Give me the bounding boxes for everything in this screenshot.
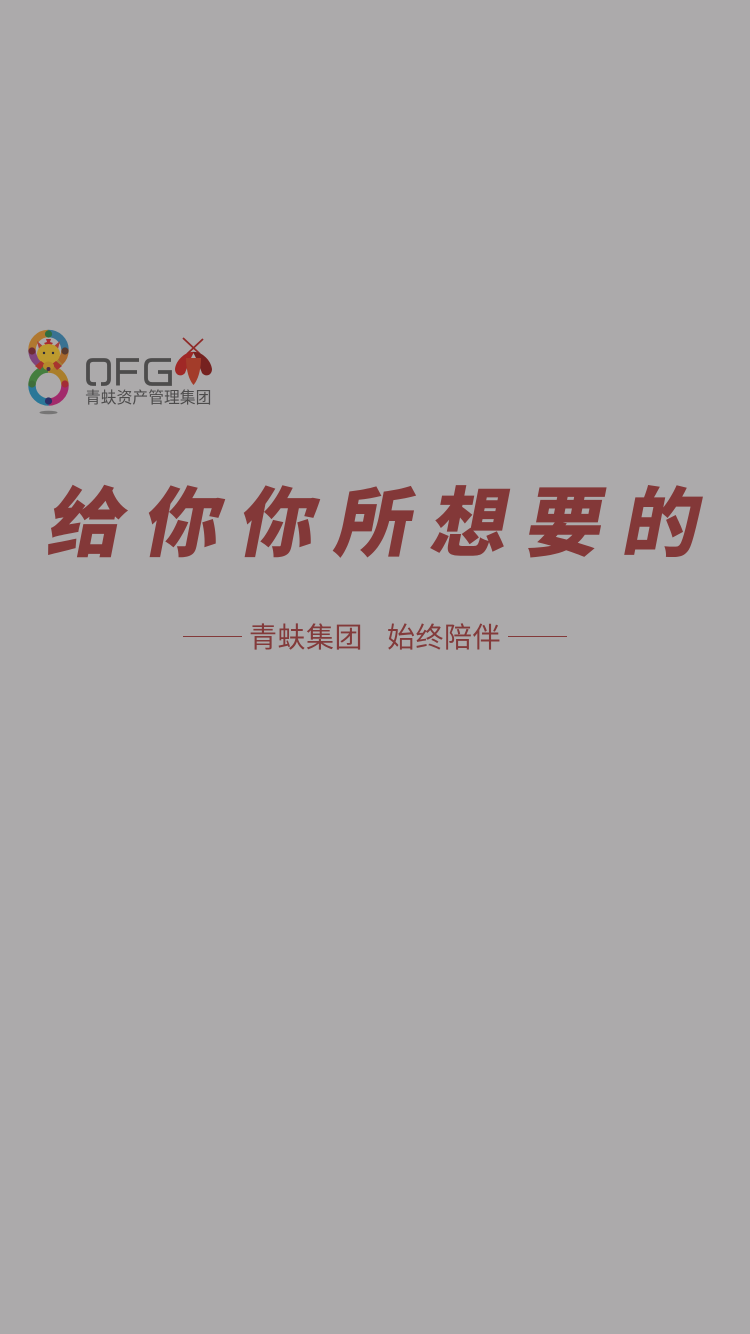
title: 你 bbox=[233, 482, 325, 567]
title bbox=[42, 482, 709, 567]
subtitle tagline bbox=[183, 622, 567, 653]
title: 想 bbox=[425, 482, 517, 567]
title: 你 bbox=[138, 482, 230, 567]
icon: figure eight mascot bbox=[28, 330, 69, 414]
title: 的 bbox=[617, 482, 709, 567]
title: 所 bbox=[329, 482, 421, 567]
logo butterfly icon bbox=[175, 338, 212, 385]
title: 要 bbox=[520, 482, 612, 567]
logo bbox=[28, 330, 212, 414]
logo wordmark QFG bbox=[88, 360, 171, 386]
title: 给 bbox=[42, 482, 134, 567]
logo company name: 青蚨资产管理集团 bbox=[85, 389, 211, 407]
subtitle tagline: 始终陪伴 bbox=[387, 622, 501, 653]
subtitle tagline: 青蚨集团 bbox=[249, 622, 363, 653]
